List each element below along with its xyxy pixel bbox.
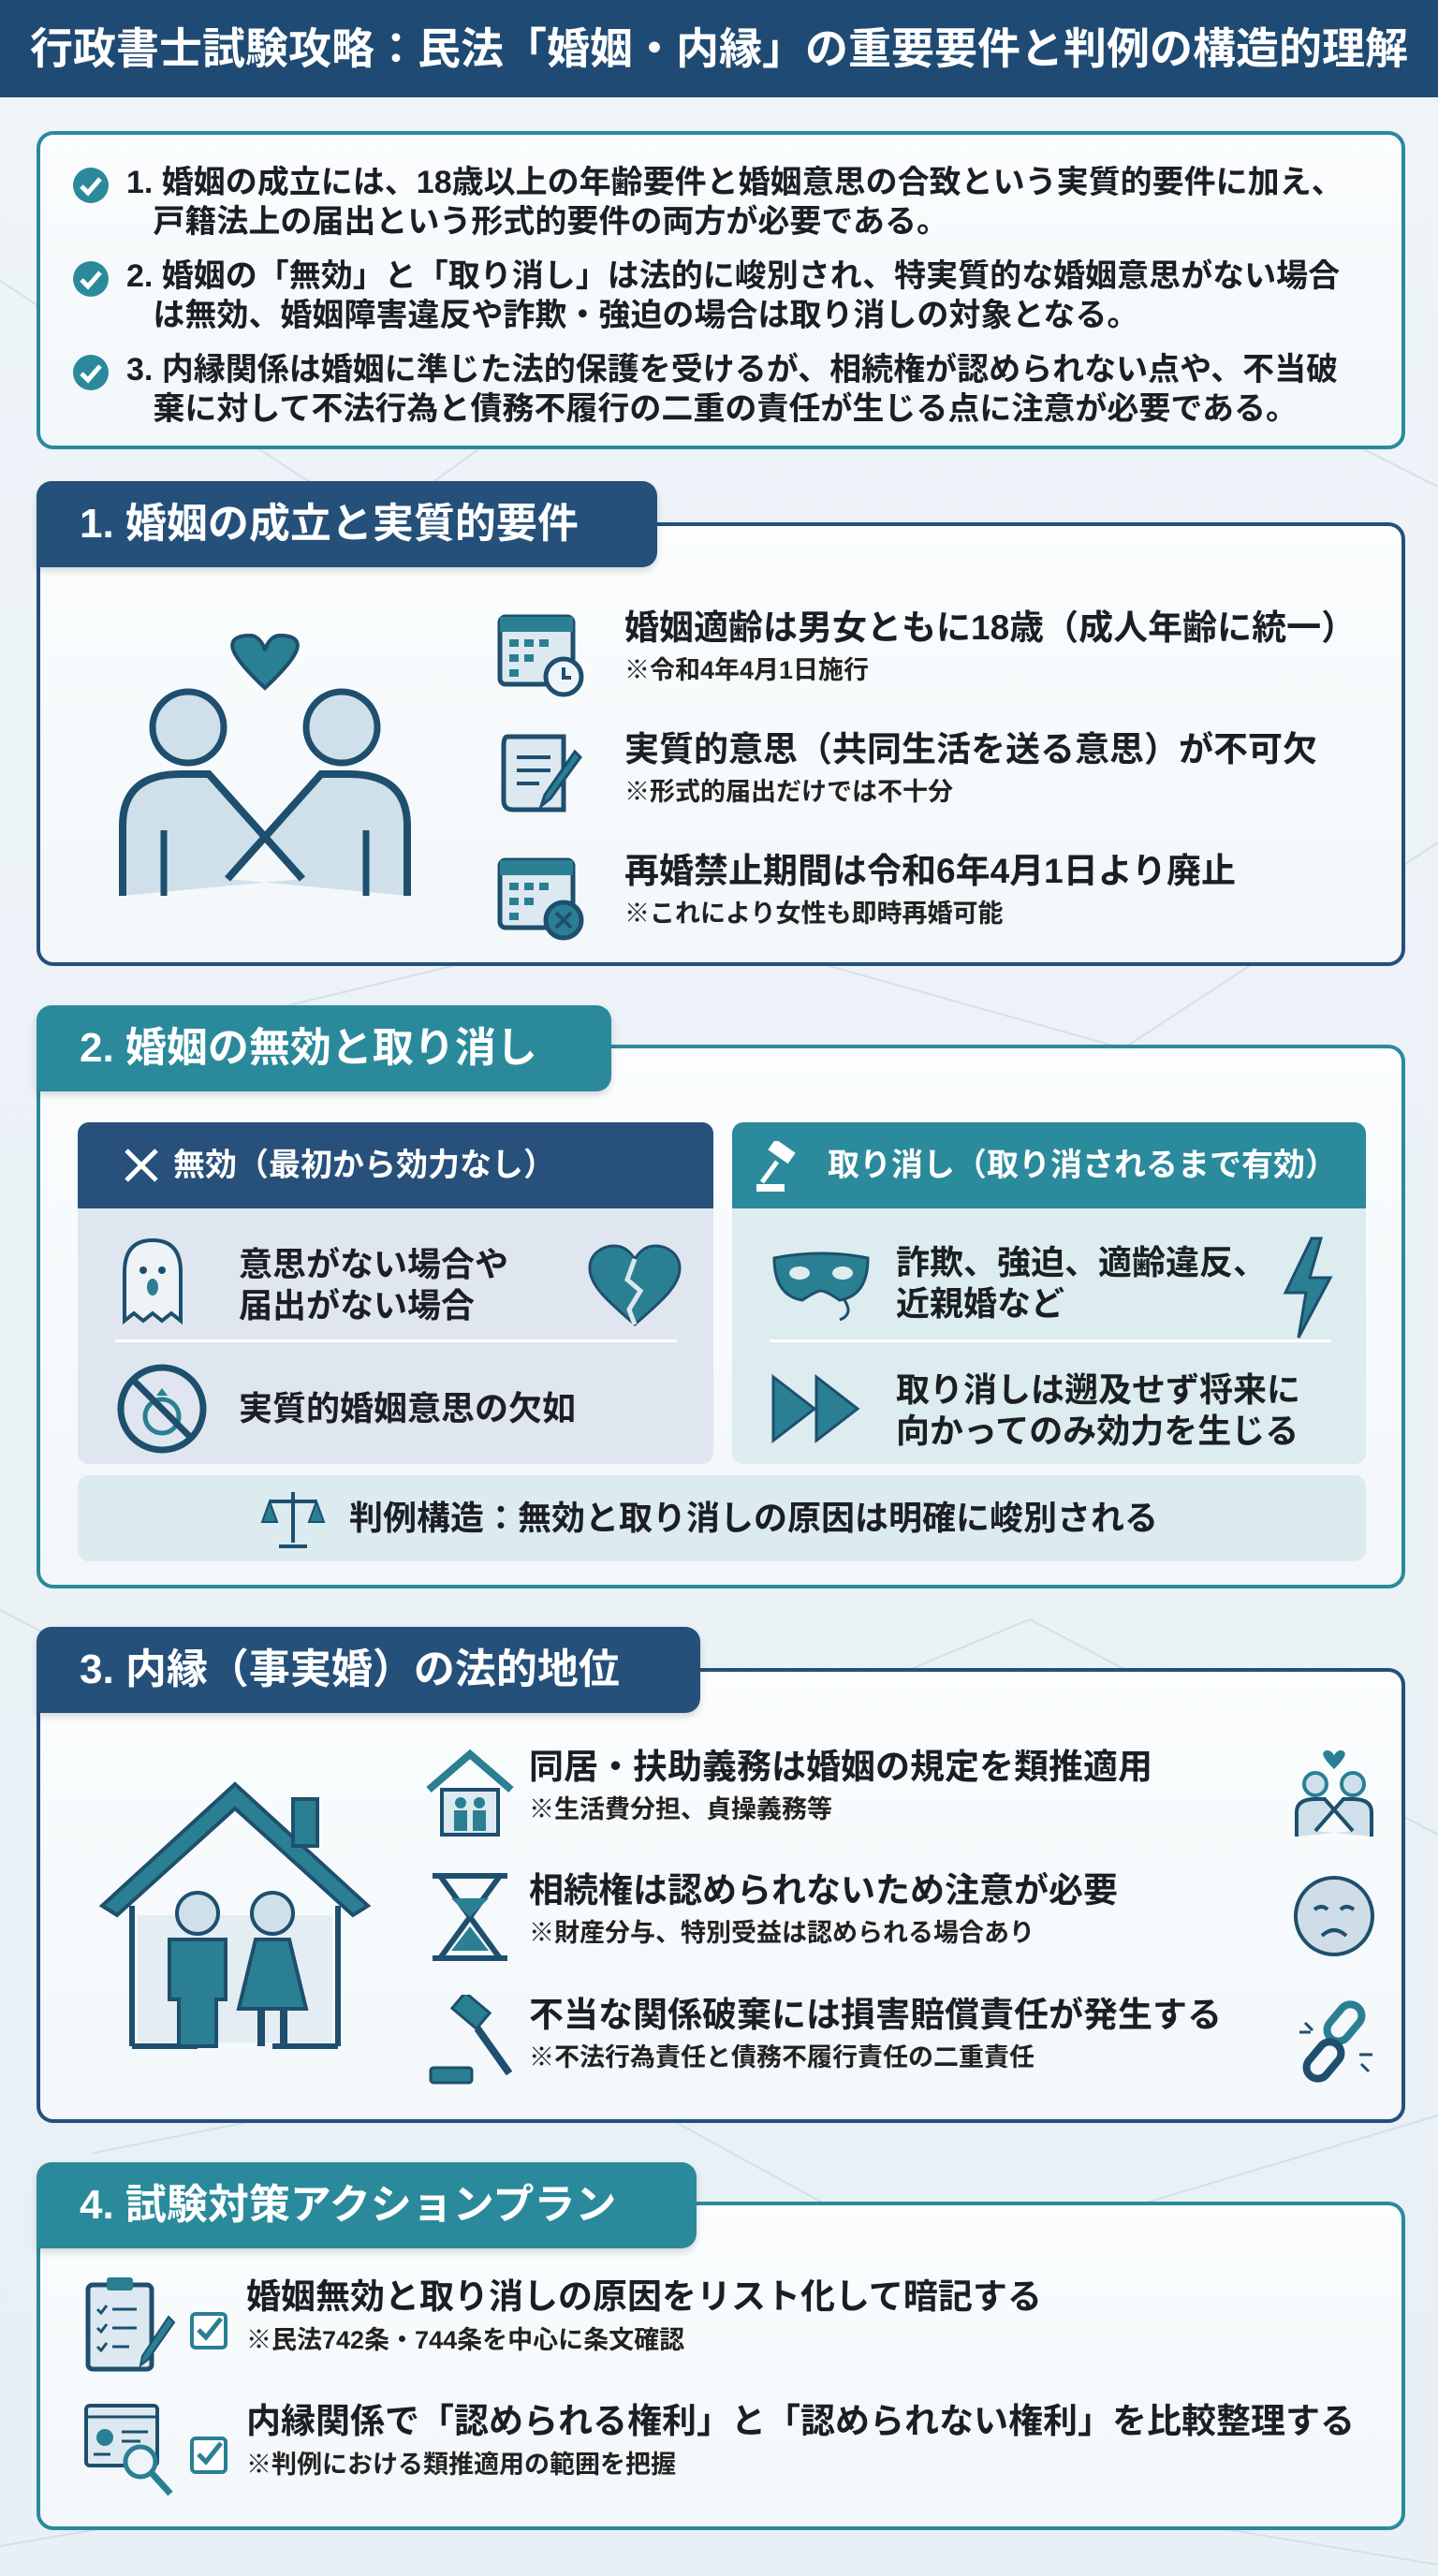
heading: section 3: [37, 1627, 700, 1713]
item: substantive intent: 実質的意思（共同生活を送る意思）が不可欠: [624, 730, 1317, 768]
column header: void: 無効（最初から効力なし）: [173, 1148, 555, 1183]
heading: section 1: [37, 481, 657, 567]
summary item 1: 1. 婚姻の成立には、18歳以上の年齢要件と婚姻意思の合致という実質的要件に加え、: [126, 165, 1343, 200]
item: no inheritance: [433, 1871, 1374, 1961]
item: remarriage ban abolished: ※これにより女性も即時再婚可能: [624, 900, 1003, 928]
item: no inheritance: 相続権は認められないため注意が必要: [529, 1871, 1118, 1910]
heading: section 4: 4. 試験対策アクションプラン: [80, 2182, 616, 2228]
row: lack of intent: [118, 1365, 576, 1453]
summary item 1: 戸籍法上の届出という形式的要件の両方が必要である。: [153, 204, 948, 240]
action item 1: [86, 2277, 1042, 2372]
callout: case law structure: 判例構造：無効と取り消しの原因は明確に峻別される: [349, 1499, 1158, 1537]
action item 2: 内縁関係で「認められる権利」と「認められない権利」を比較整理する: [246, 2402, 1355, 2440]
summary item 3: 棄に対して不法行為と債務不履行の二重の責任が生じる点に注意が必要である。: [153, 391, 1298, 427]
item: marriage age: 婚姻適齢は男女ともに18歳（成人年齢に統一）: [624, 608, 1356, 647]
action item 1: ※民法742条・744条を中心に条文確認: [246, 2326, 684, 2354]
summary box: [37, 131, 1405, 449]
row: not retroactive: 取り消しは遡及せず将来に: [896, 1370, 1300, 1409]
item: no inheritance: ※財産分与、特別受益は認められる場合あり: [529, 1919, 1034, 1947]
summary item 1: [73, 165, 1343, 240]
summary item 2: [73, 258, 1340, 333]
column: rescission: [732, 1122, 1366, 1464]
row: not retroactive: [771, 1370, 1300, 1450]
column header: void: [78, 1122, 713, 1208]
item: marriage age: [498, 608, 1356, 696]
item: damages liability: ※不法行為責任と債務不履行責任の二重責任: [529, 2043, 1034, 2071]
item: substantive intent: ※形式的届出だけでは不十分: [624, 778, 953, 806]
row: no intent: 意思がない場合や: [239, 1245, 508, 1283]
heading: section 4: [37, 2162, 697, 2248]
panel: section 4: [37, 2202, 1405, 2530]
illustration: house with couple: [99, 1781, 371, 2049]
heading: section 3: 3. 内縁（事実婚）の法的地位: [80, 1647, 620, 1692]
heading: section 2: [37, 1005, 611, 1091]
item: cohabitation duty: 同居・扶助義務は婚姻の規定を類推適用: [529, 1748, 1152, 1786]
panel: section 1: [37, 522, 1405, 966]
callout: case law structure: [78, 1475, 1366, 1561]
heading: section 1: 1. 婚姻の成立と実質的要件: [80, 501, 579, 547]
item: remarriage ban abolished: 再婚禁止期間は令和6年4月1日より廃止: [624, 852, 1236, 890]
item: damages liability: 不当な関係破棄には損害賠償責任が発生する: [529, 1996, 1222, 2034]
item: damages liability: [429, 1995, 1372, 2084]
item: substantive intent: [502, 730, 1317, 812]
summary item 2: は無効、婚姻障害違反や詐欺・強迫の場合は取り消しの対象となる。: [153, 298, 1138, 333]
item: cohabitation duty: [427, 1748, 1373, 1837]
summary item 3: [73, 352, 1338, 427]
title bar: [0, 0, 1438, 97]
heading: section 2: 2. 婚姻の無効と取り消し: [80, 1025, 537, 1071]
action item 2: ※判例における類推適用の範囲を把握: [246, 2451, 676, 2479]
column header: rescission: 取り消し（取り消されるまで有効）: [828, 1148, 1337, 1183]
summary item 2: 2. 婚姻の「無効」と「取り消し」は法的に峻別され、特実質的な婚姻意思がない場合: [126, 258, 1340, 294]
column: void: [78, 1122, 713, 1464]
illustration: couple: [119, 634, 411, 896]
row: fraud etc: 近親婚など: [896, 1284, 1064, 1323]
row: fraud etc: 詐欺、強迫、適齢違反、: [896, 1243, 1267, 1281]
column header: rescission: [732, 1122, 1366, 1208]
summary item 3: 3. 内縁関係は婚姻に準じた法的保護を受けるが、相続権が認められない点や、不当破: [126, 352, 1338, 388]
item: remarriage ban abolished: [498, 852, 1236, 940]
row: lack of intent: 実質的婚姻意思の欠如: [239, 1389, 576, 1427]
panel: section 2: [37, 1045, 1405, 1588]
title bar: 行政書士試験攻略：民法「婚姻・内縁」の重要要件と判例の構造的理解: [30, 24, 1408, 73]
row: not retroactive: 向かってのみ効力を生じる: [896, 1412, 1299, 1450]
item: cohabitation duty: ※生活費分担、貞操義務等: [529, 1795, 832, 1823]
row: fraud etc: [773, 1237, 1333, 1339]
action item 2: [84, 2402, 1355, 2496]
action item 1: 婚姻無効と取り消しの原因をリスト化して暗記する: [246, 2277, 1042, 2316]
row: no intent: [123, 1238, 682, 1326]
panel: section 3: [37, 1668, 1405, 2123]
item: marriage age: ※令和4年4月1日施行: [624, 656, 869, 684]
row: no intent: 届出がない場合: [239, 1286, 475, 1325]
